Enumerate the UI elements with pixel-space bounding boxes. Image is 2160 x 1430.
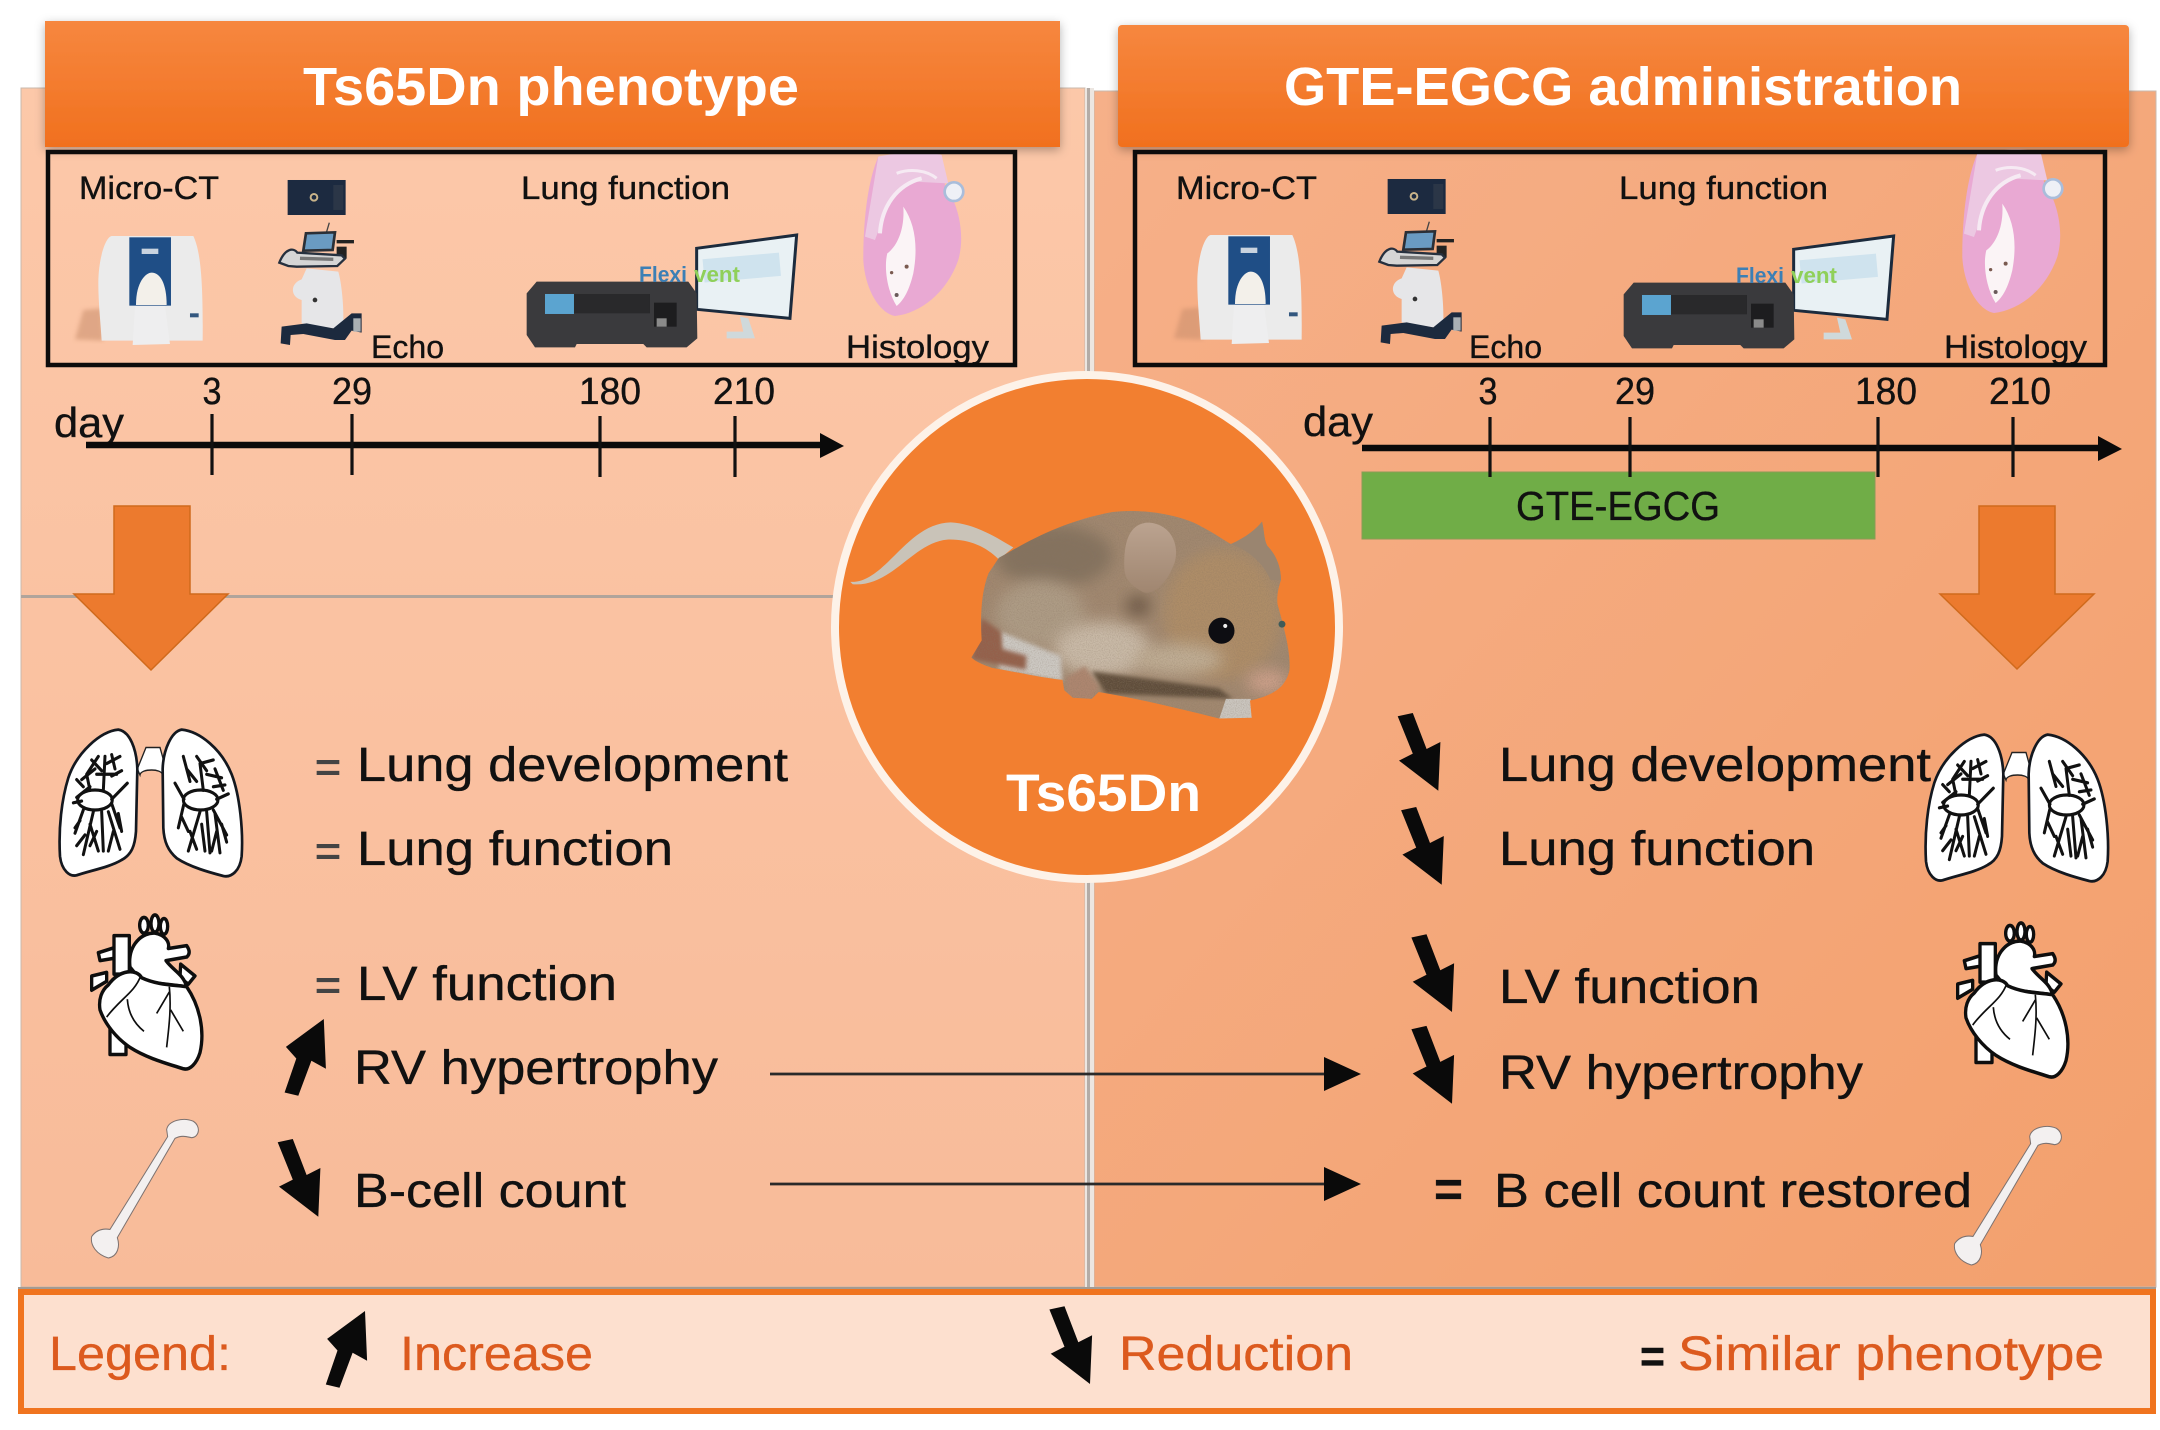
right timeline: 3: [1478, 371, 1498, 413]
label: Lung function: Lung function: [521, 170, 730, 206]
legend: [18, 1287, 2156, 1411]
right results text: [1398, 713, 1972, 1218]
icon: lungs (right): [1926, 735, 2108, 881]
left timeline: 3: [202, 371, 222, 413]
row: Lung development: =: [315, 743, 341, 792]
left timeline: 180: [579, 371, 641, 413]
icon: micro-CT scanner (right): [1174, 235, 1302, 344]
header: GTE-EGCG administration: GTE-EGCG administration: [1284, 57, 1962, 117]
legend item: reduction: [1049, 1306, 1353, 1384]
row: Lung function reduced: [1401, 807, 1815, 885]
label: Micro-CT: Micro-CT: [79, 170, 219, 206]
left timeline: 29: [332, 371, 372, 413]
row: LV function reduced: LV function: [1499, 961, 1760, 1014]
label: Lung function (right): Lung function: [1619, 170, 1828, 206]
icon label: Flexivent logo (right): vent: [1791, 263, 1838, 288]
legend item: similar phenotype: Similar phenotype: [1678, 1328, 2104, 1381]
row: Lung function reduced: Lung function: [1499, 823, 1815, 876]
label: Micro-CT (right): Micro-CT: [1176, 170, 1317, 206]
icon: histology heart section (right): [1962, 150, 2062, 313]
legend item: similar phenotype: =: [1640, 1330, 1665, 1382]
row: RV hypertrophy with up arrow: [285, 1019, 718, 1096]
row: Lung development reduced: Lung development: [1499, 739, 1931, 792]
icon: echo ultrasound machine (right): [1379, 179, 1462, 344]
icon label: Flexivent logo: vent: [694, 262, 741, 287]
right timeline: [1303, 371, 2122, 539]
row: Lung function: Lung function: [357, 823, 673, 876]
icon label: Flexivent logo: Flexi: [639, 262, 687, 287]
right timeline: day: [1303, 398, 1373, 445]
row: RV hypertrophy reduced: [1411, 1026, 1863, 1104]
row: B-cell count with down arrow: [278, 1139, 626, 1218]
label: Histology: Histology: [846, 329, 989, 365]
header: Ts65Dn phenotype: [45, 21, 1060, 147]
left timeline: [54, 371, 844, 477]
legend item: increase: [326, 1311, 593, 1388]
left results text: [278, 739, 788, 1218]
right timeline: 210: [1989, 371, 2051, 413]
row: B-cell count with down arrow: B-cell count: [354, 1165, 626, 1218]
icon: bone (right): [1954, 1126, 2061, 1265]
legend item: increase: Increase: [400, 1328, 593, 1381]
icon: micro-CT scanner: [75, 236, 203, 345]
label: Echo (right): Echo: [1469, 329, 1542, 365]
icon: lung function instrument (right): [1624, 236, 1894, 348]
label: Echo: Echo: [371, 329, 444, 365]
row: Lung function: =: [315, 827, 341, 876]
row: LV function: =: [315, 961, 341, 1010]
icon: histology heart section: [863, 153, 963, 316]
header: GTE-EGCG administration: [1118, 25, 2129, 147]
row: Lung development reduced: [1398, 713, 1931, 792]
icon: heart (right): [1958, 923, 2068, 1077]
icon label: Flexivent logo (right): Flexi: [1736, 263, 1784, 288]
connector arrow: RV hypertrophy: [770, 1057, 1361, 1091]
right methods box: [1135, 150, 2105, 365]
row: B cell count restored: =: [1434, 1161, 1463, 1217]
icon: echo ultrasound machine: [279, 180, 362, 345]
left timeline: 210: [713, 371, 775, 413]
left methods box: [48, 152, 1015, 365]
central circle: Ts65Dn mouse: Ts65Dn: [1006, 764, 1201, 823]
legend title: Legend:: [49, 1328, 231, 1381]
treatment bar: GTE-EGCG: GTE-EGCG: [1516, 483, 1720, 529]
label: Histology (right): Histology: [1944, 329, 2087, 365]
treatment bar: GTE-EGCG: [1362, 472, 1875, 539]
icon: bone (left): [91, 1119, 198, 1258]
row: B cell count restored: B cell count restored: [1494, 1165, 1972, 1218]
connector arrow: B-cell count: [770, 1167, 1361, 1201]
header: Ts65Dn phenotype: Ts65Dn phenotype: [303, 57, 799, 117]
left timeline: day: [54, 399, 124, 446]
icon: lungs (left): [60, 730, 242, 876]
right panel background: [1094, 91, 2156, 1287]
row: RV hypertrophy with up arrow: RV hypertrophy: [354, 1042, 718, 1095]
row: RV hypertrophy reduced: RV hypertrophy: [1499, 1047, 1863, 1100]
row: LV function: LV function: [357, 958, 617, 1011]
arrow: right orange down arrow: [1940, 506, 2094, 669]
legend item: reduction: Reduction: [1119, 1328, 1353, 1381]
right timeline: 180: [1855, 371, 1917, 413]
row: LV function reduced: [1411, 934, 1760, 1014]
right timeline: 29: [1615, 371, 1655, 413]
icon label: Flexivent logo (right): [1736, 263, 1838, 288]
icon label: Flexivent logo: [639, 262, 741, 287]
icon: lung function instrument with monitor: [527, 235, 797, 347]
icon: heart (left): [92, 915, 202, 1069]
photo: mouse: [850, 504, 1295, 725]
row: Lung development: Lung development: [357, 739, 788, 792]
left panel background: [21, 88, 1085, 1287]
arrow: left orange down arrow: [74, 506, 228, 670]
central circle: Ts65Dn mouse: [835, 375, 1339, 879]
